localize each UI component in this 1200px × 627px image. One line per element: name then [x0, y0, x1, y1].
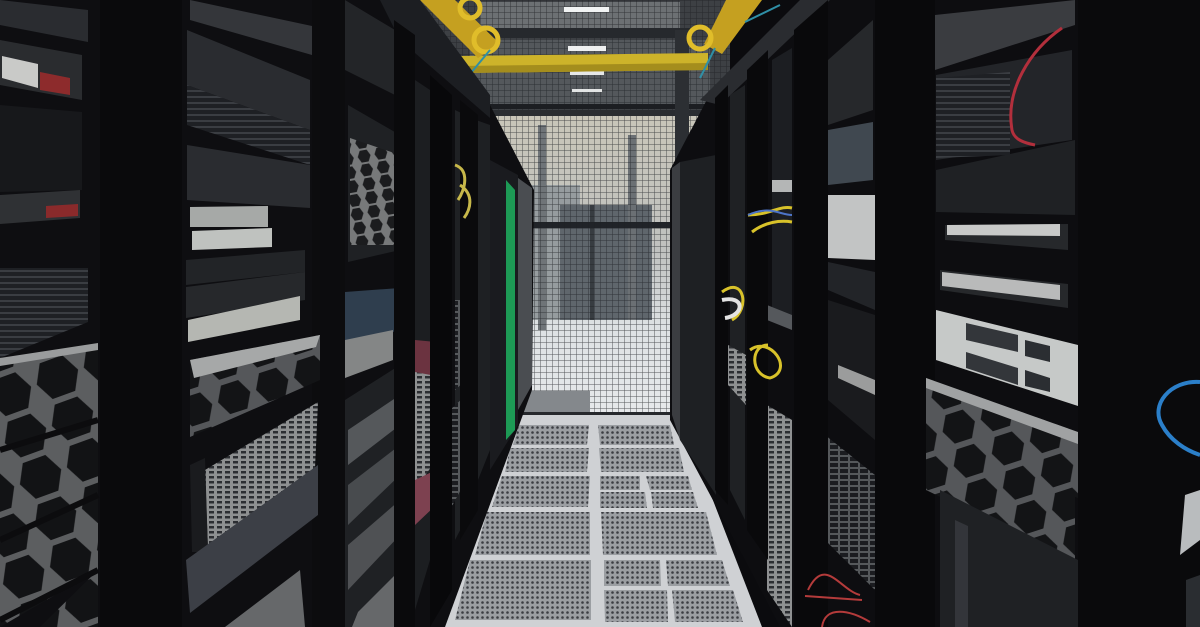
raised floor [442, 415, 762, 627]
structural post behind yellow beam [675, 30, 689, 165]
far servers [680, 155, 716, 495]
mid servers [415, 80, 430, 610]
floor tiles right column [598, 425, 743, 622]
right rack row [670, 0, 1200, 627]
far-left servers [0, 0, 88, 42]
yellow and blue patch cables [455, 165, 470, 218]
ceiling with mesh and lights [400, 0, 730, 116]
front servers [190, 0, 312, 55]
white connector at right edge [1180, 490, 1200, 555]
back wall and far cage room [488, 116, 712, 416]
far servers [476, 120, 490, 485]
vertical rack posts [100, 0, 182, 627]
green indicator strip [506, 180, 515, 440]
left rack row [0, 0, 534, 627]
front servers [935, 0, 1075, 70]
vertical rack posts [794, 0, 828, 627]
floor tiles left column [455, 425, 591, 620]
blue cable at right edge [1158, 382, 1200, 455]
yellow overhead cable tray beam [420, 0, 780, 80]
mid servers [828, 20, 873, 125]
patch cables [722, 207, 792, 378]
